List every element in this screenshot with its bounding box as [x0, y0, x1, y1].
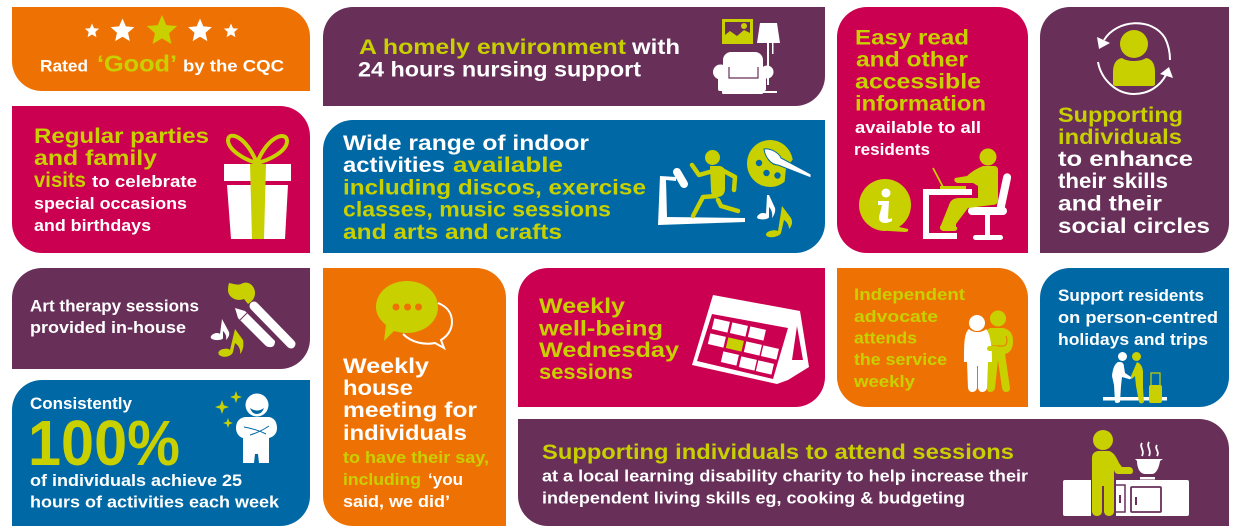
text: well-being Wednesday: sessions [539, 360, 633, 384]
text: weekly house meeting: including [343, 470, 421, 489]
panel: art therapy [12, 268, 310, 369]
icon: person cooking at kitchen counter [1063, 430, 1189, 518]
text: supporting individuals [1058, 103, 1210, 238]
panel: easy read information [837, 7, 1028, 253]
icon: music notes [757, 195, 792, 237]
text: weekly house meeting: ‘you [428, 470, 463, 489]
text: independent advocate: advocate [854, 307, 938, 326]
text: easy read information: Easy read [855, 26, 969, 50]
text: homely environment: A homely environment [359, 35, 626, 59]
text: parties heading and description: and family [34, 146, 157, 170]
panel: well-being Wednesday [518, 268, 825, 407]
text: independent advocate: the service [854, 350, 947, 369]
text: attend sessions [542, 440, 1028, 508]
text: person-centred holidays [1058, 286, 1218, 349]
icon: desk calendar [692, 295, 809, 384]
text: supporting individuals: to enhance [1058, 147, 1193, 171]
panel: homely environment [323, 7, 825, 106]
text: indoor activities: classes, music sessions [343, 198, 611, 222]
text: easy read information: available to all [855, 118, 981, 137]
text: attend sessions: Supporting individuals to attend sessions [542, 440, 1014, 464]
text: well-being Wednesday: Weekly [539, 294, 625, 318]
icon: speech bubbles [376, 281, 452, 348]
text: person-centred holidays: Support residents [1058, 286, 1204, 305]
text: indoor activities: Wide range of indoor [343, 131, 590, 155]
text: parties heading and description [34, 124, 209, 235]
text: homely environment: 24 hours nursing support [358, 58, 641, 82]
text: weekly house meeting: to have their say, [343, 448, 489, 467]
text: person-centred holidays: on person-centred [1058, 308, 1218, 327]
panel: person-centred holidays [1040, 268, 1229, 407]
text: consistently 100 percent: Consistently [30, 394, 133, 413]
text: person-centred holidays: holidays and trips [1058, 330, 1208, 349]
text: well-being Wednesday: Wednesday [539, 338, 679, 362]
text: rated good by the CQC: by the CQC [183, 56, 284, 76]
panel: consistently 100 percent [12, 380, 310, 526]
text: rated good by the CQC: ‘Good’ [97, 50, 177, 76]
text: consistently 100 percent: 100% [28, 407, 180, 479]
text: homely environment [358, 35, 680, 82]
text: indoor activities [343, 131, 646, 244]
text: rated good by the CQC [40, 50, 284, 76]
icon: person at desk with laptop [923, 148, 1012, 240]
text: independent advocate: attends [854, 328, 917, 348]
text: well-being Wednesday: well-being [538, 316, 663, 340]
text: weekly house meeting: Weekly [343, 354, 429, 378]
text: weekly house meeting: said, we did’ [343, 492, 450, 511]
text: weekly house meeting: meeting for [343, 398, 478, 422]
text: well-being Wednesday [538, 294, 679, 384]
text: indoor activities: and arts and crafts [343, 220, 562, 244]
text: consistently 100 percent: hours of activities each week [30, 492, 280, 512]
text: parties heading and description: Regular parties [34, 124, 209, 148]
panel: supporting individuals to attend sessions [518, 419, 1229, 526]
text: easy read information [854, 26, 986, 159]
panel: indoor activities [323, 120, 825, 253]
text: parties heading and description: visits [34, 168, 86, 192]
text: supporting individuals: and their [1058, 192, 1163, 216]
text: weekly house meeting: house [343, 376, 413, 400]
text: consistently 100 percent: of individuals achieve 25 [30, 471, 242, 490]
text: attend sessions: at a local learning disability charity to help increase their [542, 466, 1028, 486]
text: indoor activities: activities [343, 153, 445, 177]
panel: weekly house meeting [323, 268, 506, 526]
panel: rated good [12, 7, 310, 91]
icon: five stars [85, 15, 238, 44]
icon: paint brush and pencil [228, 283, 291, 347]
text: homely environment: with [631, 35, 680, 59]
text: independent advocate: weekly [853, 372, 916, 391]
text: art therapy: Art therapy sessions [30, 296, 199, 316]
icon: greeting travellers with suitcase [1103, 352, 1167, 404]
panel: enhance skills [1040, 7, 1229, 253]
text: easy read information: and other [856, 48, 969, 72]
icon: music notes [211, 319, 243, 357]
icon: treadmill runner [658, 150, 745, 225]
text: weekly house meeting [343, 354, 489, 511]
text: consistently 100 percent [28, 394, 280, 512]
icon: artist palette [747, 140, 811, 188]
text: independent advocate [853, 285, 965, 391]
text: attend sessions: independent living skills eg, cooking & budgeting [542, 488, 965, 508]
text: supporting individuals: individuals [1058, 125, 1182, 149]
text: parties heading and description: to celebrate [92, 172, 197, 191]
text: easy read information: information [855, 92, 986, 116]
text: indoor activities: including discos, exercise [343, 176, 646, 200]
text: independent advocate: Independent [854, 285, 965, 304]
icon: person with cycle arrows [1097, 23, 1173, 94]
text: supporting individuals: social circles [1058, 214, 1210, 238]
text: supporting individuals: their skills [1058, 169, 1168, 193]
text: art therapy [30, 296, 199, 337]
icon: two people embracing [964, 310, 1013, 392]
text: parties heading and description: and birthdays [34, 216, 151, 235]
icon: information speech bubble [859, 179, 911, 232]
icon: proud person with sparkles [215, 391, 277, 463]
text: supporting individuals: Supporting [1058, 103, 1183, 127]
text: weekly house meeting: individuals [343, 421, 467, 445]
panel: parties and family visits [12, 106, 310, 253]
panel: independent advocate [837, 268, 1028, 407]
text: indoor activities: available [453, 153, 563, 177]
text: rated good by the CQC: Rated [40, 56, 88, 76]
text: easy read information: accessible [855, 70, 981, 94]
text: art therapy: provided in-house [30, 318, 186, 337]
text: easy read information: residents [854, 140, 930, 159]
text: parties heading and description: special occasions [34, 194, 187, 213]
icon: gift box [224, 136, 291, 239]
icon: armchair, lamp and picture [713, 19, 780, 94]
